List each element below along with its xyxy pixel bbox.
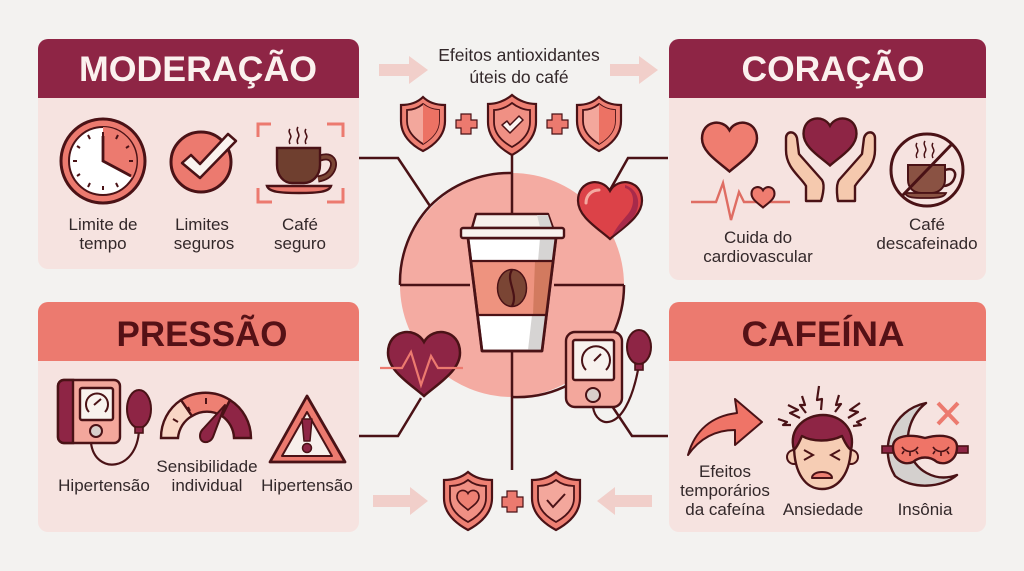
labels: moderação: [69, 215, 326, 253]
heading: pressão: PRESSÃO: [116, 315, 288, 354]
labels: cafeína: da cafeína: [685, 500, 765, 519]
labels: moderação: seguro: [274, 234, 326, 253]
heading: moderação: MODERAÇÃO: [79, 50, 317, 89]
heading: moderação: [38, 39, 359, 98]
heading: coração: CORAÇÃO: [742, 50, 924, 89]
icon: warning triangle: [270, 396, 345, 462]
labels: moderação: Limite de: [69, 215, 137, 234]
panel: pressão: [38, 302, 359, 532]
panel: cafeína: [669, 302, 986, 532]
icon: plus: [502, 491, 523, 512]
labels: cafeína: [680, 462, 953, 519]
icon: coffee bean: [498, 270, 526, 306]
text: antioxidant effects: [438, 45, 600, 87]
labels: moderação: Limites: [175, 215, 229, 234]
labels: moderação: Café: [282, 215, 318, 234]
icon: takeaway coffee cup: [461, 214, 564, 351]
icon: top shield right: [577, 97, 621, 151]
panel: moderação: [38, 39, 359, 269]
labels: pressão: Sensibilidade: [156, 457, 258, 476]
labels: coração: descafeinado: [876, 234, 978, 253]
heading: cafeína: [669, 302, 986, 361]
arrow: top right: [610, 56, 658, 84]
icon: gauge: [161, 393, 251, 442]
icon: heart with pulse, dark: [380, 332, 463, 396]
icon: anxious face: [778, 386, 866, 489]
labels: cafeína: Ansiedade: [783, 500, 863, 519]
arrow: top left: [379, 56, 428, 84]
arrow: bottom left: [373, 487, 428, 515]
central circle with connectors: [359, 155, 668, 470]
icon: decaf coffee: [891, 134, 963, 206]
icon: plus: [547, 114, 568, 134]
labels: cafeína: Insônia: [898, 500, 953, 519]
icon: hands holding heart: [786, 118, 875, 201]
labels: coração: [703, 215, 978, 266]
icon: plus: [456, 114, 477, 134]
icon: check: [171, 132, 236, 192]
labels: coração: Cuida do: [724, 228, 792, 247]
labels: coração: Café: [909, 215, 945, 234]
icon: curved arrow: [688, 399, 762, 455]
labels: pressão: Hipertensão: [58, 476, 150, 495]
icon: clock: [61, 119, 145, 203]
icon: top shield left: [401, 97, 445, 151]
icon: coffee cup: [258, 124, 343, 202]
icon: red heart: [578, 182, 642, 239]
labels: pressão: Hipertensão: [261, 476, 353, 495]
arrow: bottom right: [597, 487, 652, 515]
heading: coração: [669, 39, 986, 98]
labels: coração: cardiovascular: [703, 247, 813, 266]
heading: cafeína: CAFEÍNA: [742, 314, 904, 354]
labels: pressão: [58, 457, 353, 495]
icon: moon and sleep mask: [882, 403, 968, 486]
labels: moderação: seguros: [174, 234, 234, 253]
text: antioxidant effects: Efeitos antioxidantes: [438, 45, 600, 65]
labels: pressão: individual: [172, 476, 242, 495]
text: antioxidant effects: úteis do café: [469, 67, 569, 87]
labels: cafeína: Efeitos: [699, 462, 751, 481]
icon: bottom shield check: [532, 472, 580, 530]
icon: bottom shield heart: [444, 472, 492, 530]
icon: top shield centre: [488, 95, 536, 155]
icon: blood pressure monitor: [58, 380, 151, 465]
panel: coração: [669, 39, 986, 280]
icon: digital pressure monitor: [566, 330, 651, 422]
icon: heart with pulse: [691, 123, 790, 220]
labels: cafeína: temporários: [680, 481, 770, 500]
heading: pressão: [38, 302, 359, 361]
labels: moderação: tempo: [79, 234, 127, 253]
